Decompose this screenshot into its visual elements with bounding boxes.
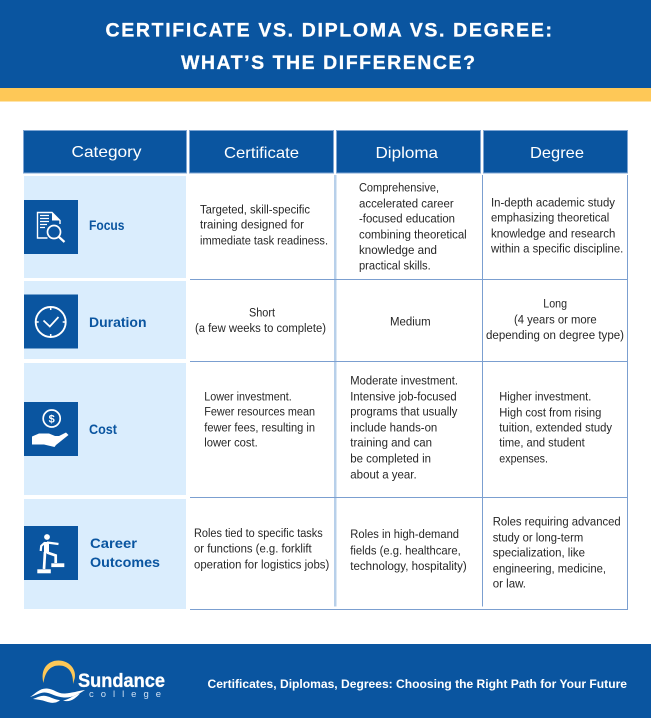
label: Cost: Cost [89,421,117,437]
text: Certificate cost: lower cost. [204,435,258,449]
text: Diploma cost: programs that usually [350,404,458,418]
text: Certificate career outcomes [194,526,329,571]
text: Certificate career outcomes: or functions (e.g. forklift [194,541,312,555]
text: Degree cost: time, and student [499,436,585,450]
footer tagline: Certificates, Diplomas, Degrees: Choosing the Right Path for Your Future [208,679,627,691]
text: Diploma career outcomes: technology, hospitality) [350,559,467,573]
icon: clock [24,294,78,348]
text: Certificate career outcomes: operation for logistics jobs) [194,557,329,571]
text: Certificate cost: fewer fees, resulting in [204,420,315,434]
text: Degree career outcomes: study or long-term [493,531,583,545]
text: Diploma cost [350,374,458,481]
table grid lines [190,175,628,610]
text: Diploma career outcomes [350,527,467,573]
logo: Sundance College: college [89,689,161,700]
text: Diploma focus: practical skills. [359,258,431,272]
label: Focus: Focus [89,217,125,233]
text: Degree cost: High cost from rising [499,406,601,420]
text: Certificate cost: Fewer resources mean [204,404,315,418]
title [106,20,552,74]
text: Degree cost: Higher investment. [499,390,591,404]
text: Degree career outcomes: engineering, medicine, [493,561,606,575]
icon: document with magnifier [24,200,78,254]
icon: hand holding coin [24,402,78,456]
panel: Focus category [24,176,186,278]
header banner [0,0,651,102]
text: Diploma focus: -focused education [359,211,455,225]
text: Degree cost: expenses. [499,452,548,466]
table header row: Category [72,144,142,161]
text: Degree career outcomes: or law. [493,577,526,591]
logo: Sundance College [30,660,165,703]
text: Certificate career outcomes: Roles tied to specific tasks [194,526,323,540]
text: Diploma focus: Comprehensive, [359,181,439,195]
text: Diploma cost: about a year. [350,467,417,481]
text: Diploma cost: Intensive job-focused [350,389,457,403]
text: Degree cost [499,390,613,466]
text: Certificate cost [204,390,315,449]
text: Certificate cost: Lower investment. [204,390,292,404]
table header row: Degree [530,145,584,162]
text: Diploma cost: include hands-on [350,420,437,434]
text: Diploma focus: knowledge and [359,243,437,257]
text: Diploma cost: be completed in [350,451,431,465]
text: Certificate duration: (a few weeks to complete) [195,321,326,335]
text: Diploma focus [359,181,467,272]
text: Degree focus: In-depth academic study [491,196,616,210]
table header row: Diploma [376,145,438,162]
label: Duration: Duration [89,314,146,330]
text: Degree focus: knowledge and research [491,227,615,241]
text: Degree cost: tuition, extended study [499,421,613,435]
text: Degree duration [486,297,624,342]
text: Degree career outcomes: Roles requiring advanced [493,515,621,529]
text: Diploma cost: training and can [350,435,432,449]
text: Degree focus: within a specific discipline. [490,241,623,255]
text: Diploma duration: Medium [390,314,431,328]
text: Degree career outcomes [493,515,621,591]
icon: hand holding coin: $ [49,414,55,426]
label: Career Outcomes: Career [90,535,138,551]
icon: person climbing steps [24,526,78,580]
text: Certificate focus: immediate task readiness. [200,234,328,248]
table header row: Certificate [224,145,299,162]
text: Certificate focus [200,202,328,248]
table header row [24,130,628,173]
text: Degree focus [490,196,623,255]
text: Degree career outcomes: specialization, like [493,546,585,560]
text: Diploma focus: combining theoretical [359,227,467,241]
text: Degree duration: depending on degree type) [486,328,624,342]
text: Degree duration: Long [543,297,567,311]
text: Degree duration: (4 years or more [514,312,597,326]
panel: Duration category [24,281,186,359]
title: WHAT’S THE DIFFERENCE? [181,52,475,74]
text: Degree focus: emphasizing theoretical [491,211,609,225]
text: Certificate duration: Short [249,306,276,320]
footer band [0,644,651,718]
text: Diploma focus: accelerated career [359,196,454,210]
label: Career Outcomes: Outcomes [90,554,160,570]
text: Certificate focus: Targeted, skill-specific [200,202,310,216]
text: Certificate duration [195,306,326,335]
label: Career Outcomes [90,535,160,570]
panel: Career Outcomes category [24,499,186,609]
logo: Sundance College: Sundance [78,671,165,692]
text: Diploma career outcomes: Roles in high-demand [350,527,459,541]
panel: Cost category [24,363,186,495]
text: Diploma cost: Moderate investment. [350,374,458,388]
title: CERTIFICATE VS. DIPLOMA VS. DEGREE: [106,20,552,42]
text: Certificate focus: training designed for [200,218,304,232]
text: Diploma career outcomes: fields (e.g. healthcare, [350,543,461,557]
